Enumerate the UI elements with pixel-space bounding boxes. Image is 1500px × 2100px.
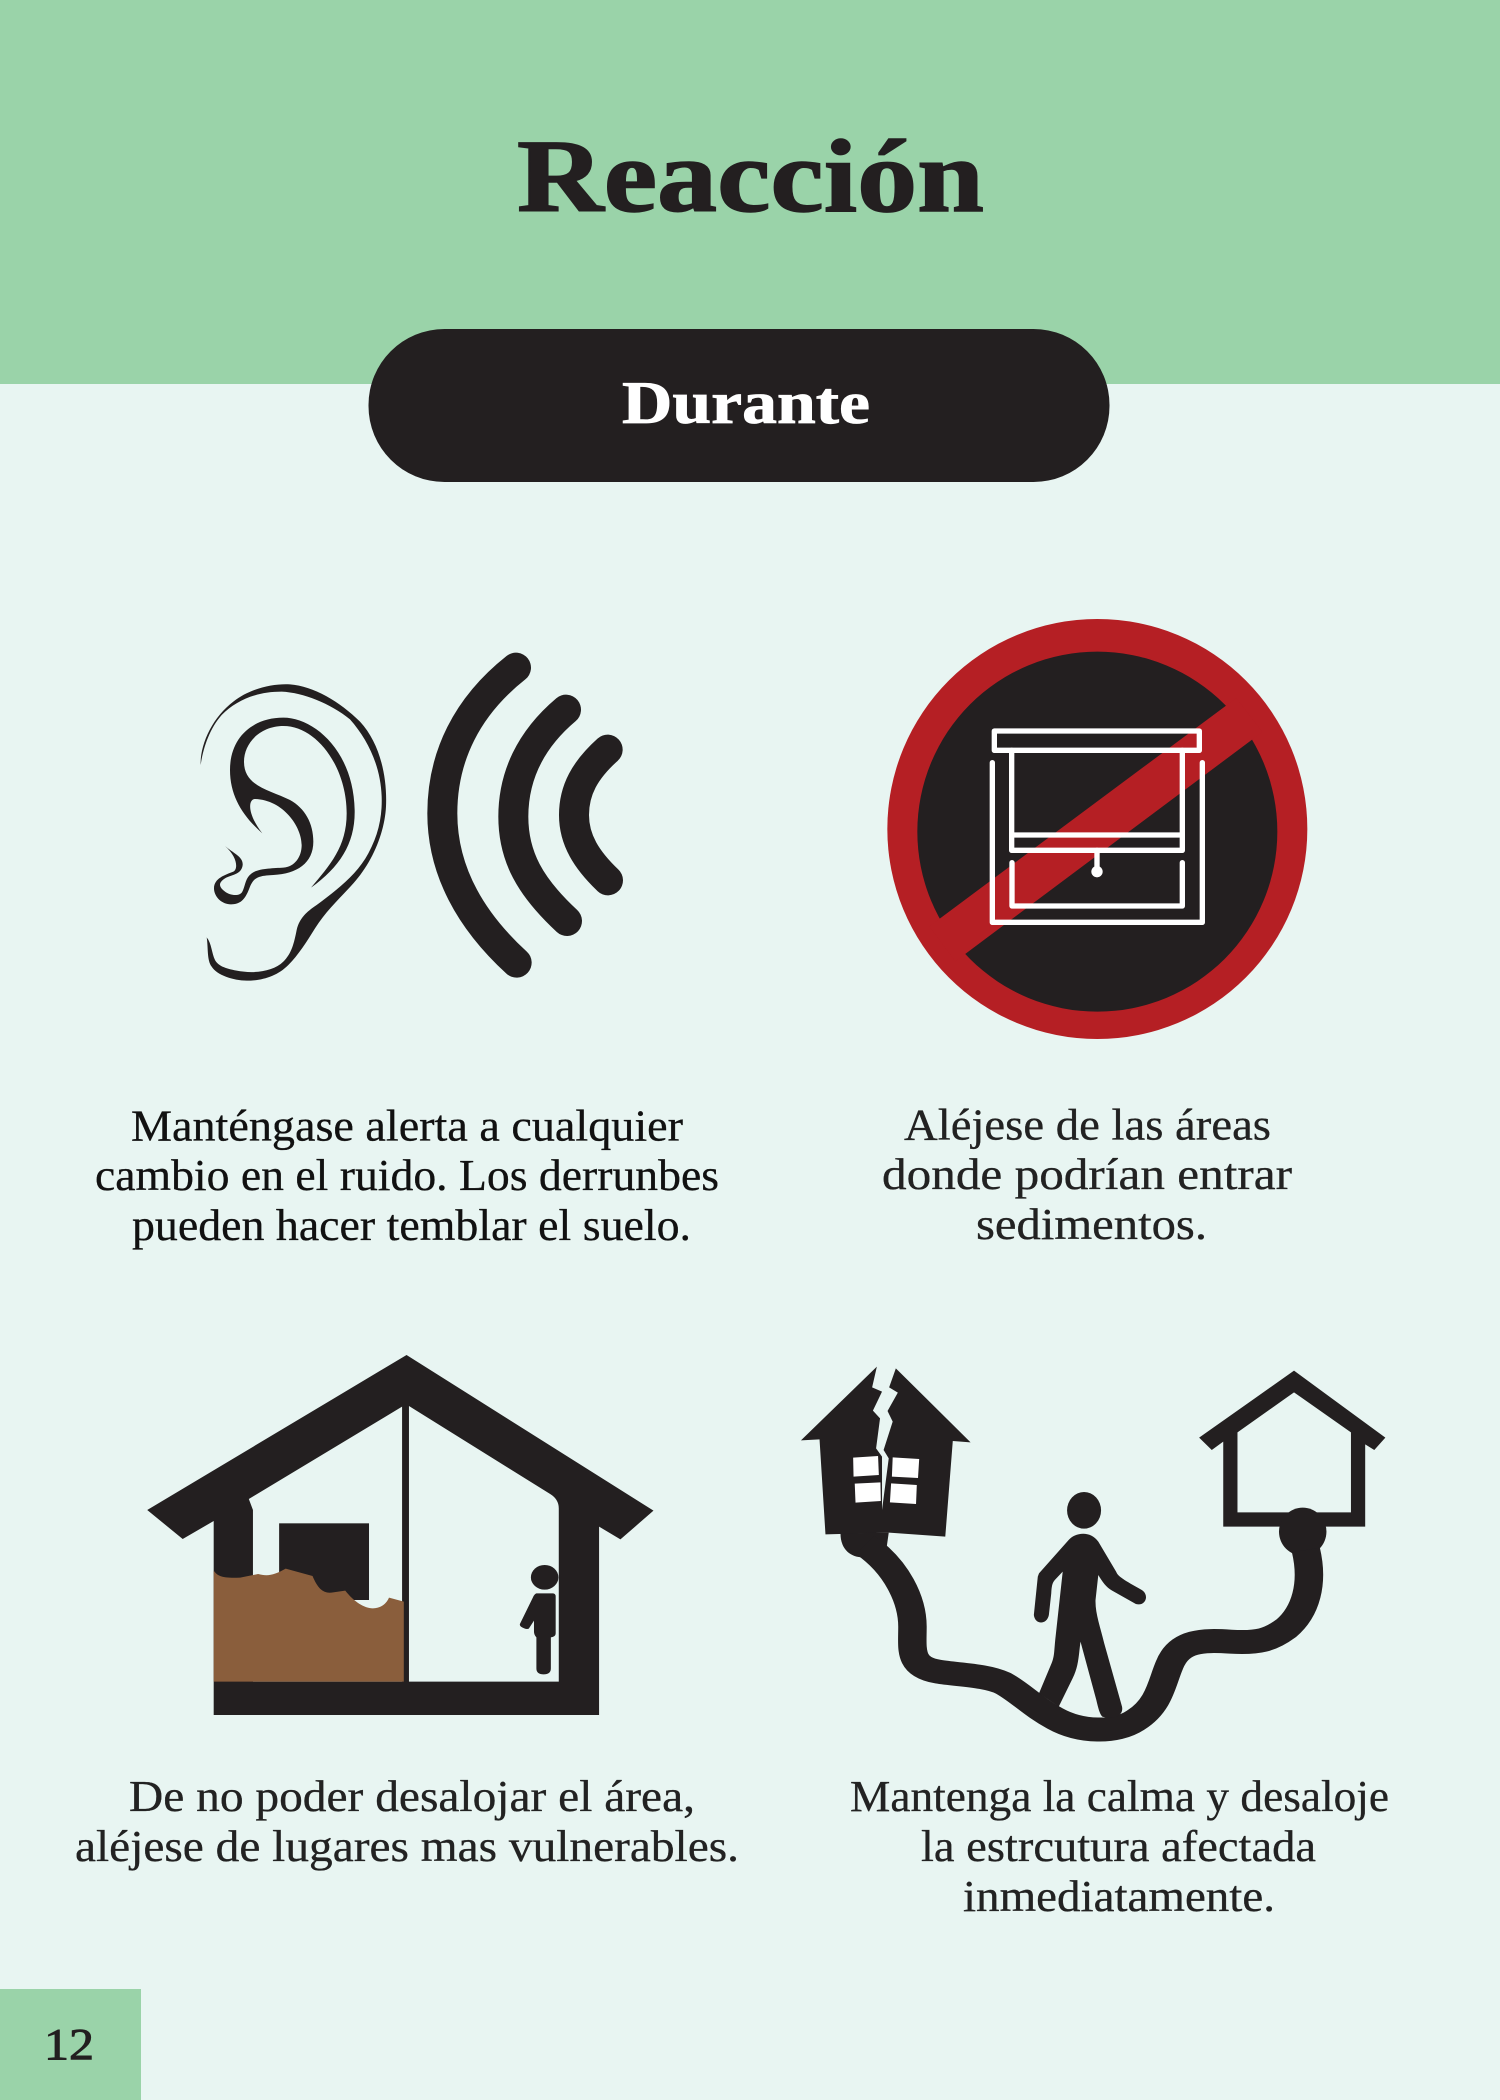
- icon: prohibition sign over window blind: [887, 619, 1307, 1039]
- text: if unable to evacuate: [75, 1772, 739, 1871]
- text: stay alert: Manténgase alerta a cualquier: [131, 1102, 683, 1150]
- pill: Durante: Durante: [622, 370, 870, 436]
- ear outer helix: [201, 684, 386, 981]
- text: move away: donde podrían entrar: [882, 1150, 1292, 1199]
- sound waves: [442, 668, 608, 963]
- text: stay calm: Mantenga la calma y desaloje: [850, 1772, 1389, 1821]
- text: move away: sedimentos.: [976, 1200, 1207, 1249]
- mud: [214, 1569, 404, 1682]
- text: if unable to evacuate: De no poder desalojar el área,: [129, 1772, 695, 1821]
- text: move away: Aléjese de las áreas: [904, 1100, 1271, 1150]
- winding path: [865, 1545, 1309, 1730]
- title: Reacción: [517, 119, 984, 234]
- pill: Durante: [368, 329, 1110, 482]
- icon: person walking from cracked house to safe house: [801, 1367, 1385, 1730]
- text: if unable to evacuate: aléjese de lugares mas vulnerables.: [75, 1822, 739, 1871]
- text: stay alert: pueden hacer temblar el suelo.: [132, 1201, 691, 1250]
- walking person: [1067, 1492, 1101, 1529]
- text: stay calm: inmediatamente.: [963, 1872, 1275, 1921]
- text: stay calm: la estrcutura afectada: [921, 1822, 1316, 1871]
- text: stay calm: [850, 1772, 1389, 1921]
- header band: [0, 0, 1500, 384]
- text: stay alert: [95, 1102, 719, 1250]
- icon: house with mud and person: [147, 1355, 653, 1715]
- page number: 12: [44, 2020, 94, 2069]
- page number: [0, 1989, 141, 2100]
- safe house: [1199, 1371, 1385, 1527]
- text: move away: [882, 1100, 1292, 1249]
- person: [520, 1565, 558, 1674]
- text: stay alert: cambio en el ruido. Los derrunbes: [95, 1151, 719, 1200]
- cracked house: [801, 1367, 971, 1537]
- icon: ear with sound waves: [201, 668, 608, 981]
- ear inner fold: [214, 718, 355, 904]
